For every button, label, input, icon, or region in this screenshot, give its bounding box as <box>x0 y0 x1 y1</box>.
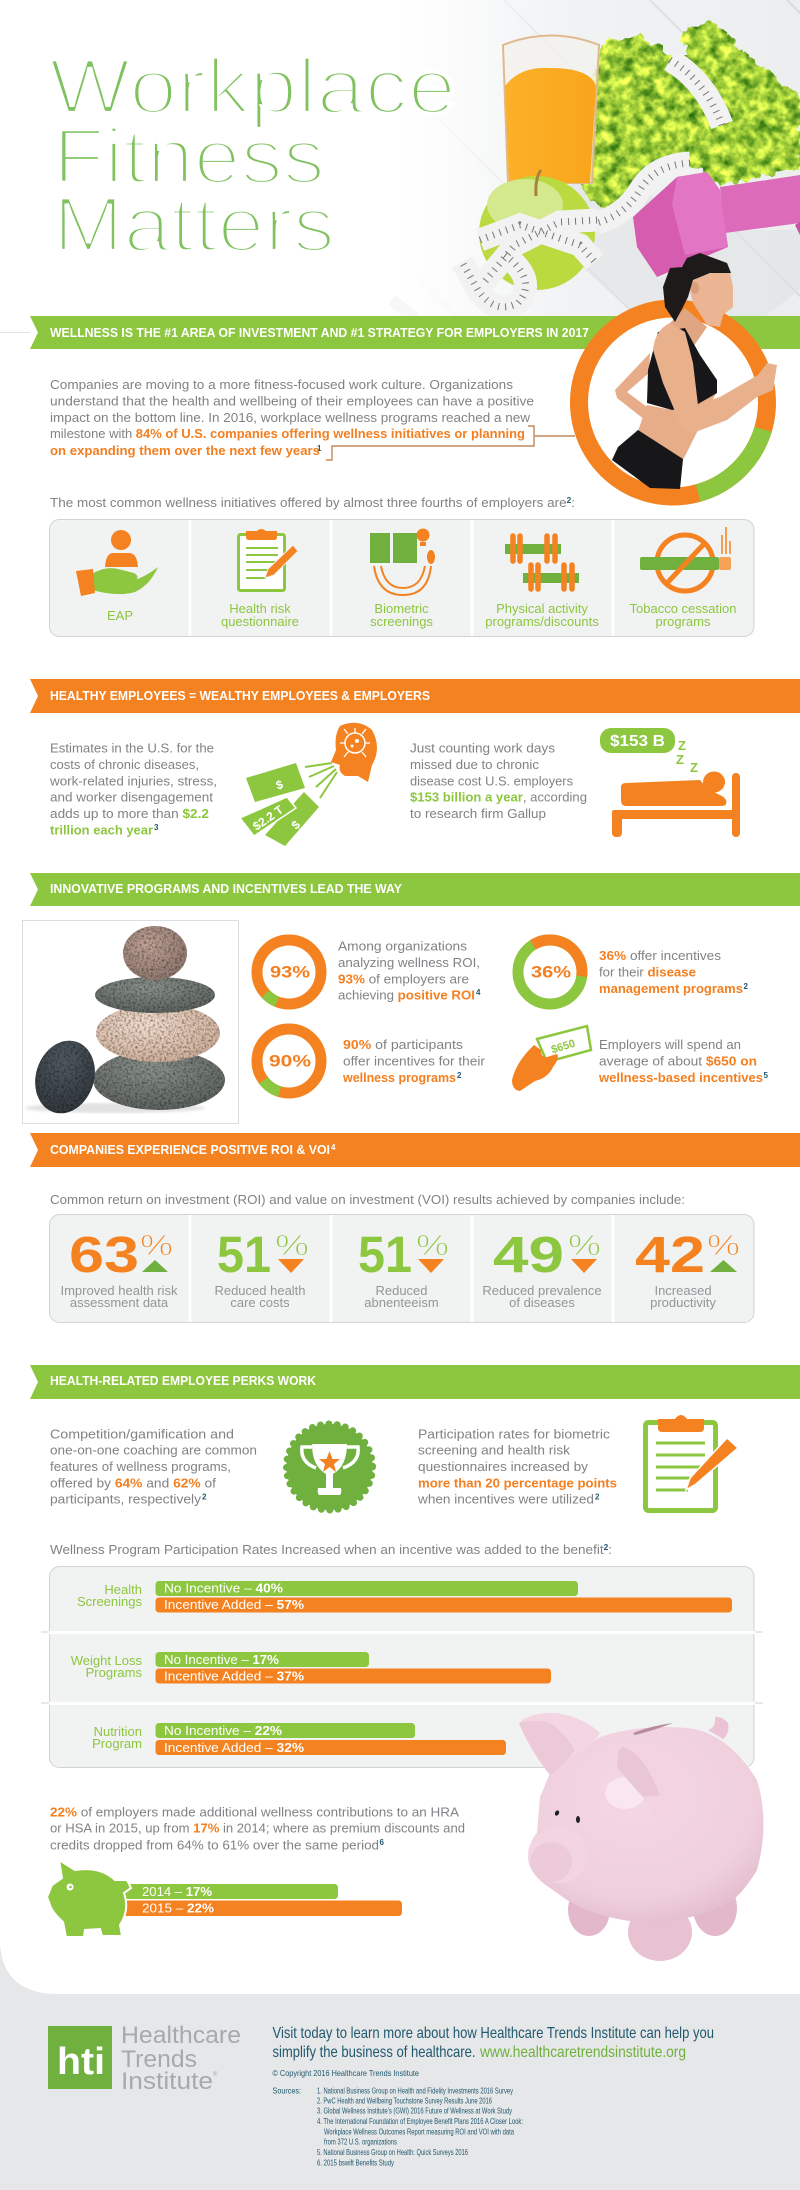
text: HRA or HSA contributions: 6 <box>380 1838 384 1847</box>
banner: positive ROI and VOI <box>30 1133 800 1167</box>
icon: small green piggy <box>47 1860 131 1937</box>
logo: Healthcare Trends Institute: ® <box>213 2071 218 2078</box>
label: physical activity: programs/discounts <box>485 614 599 629</box>
donut: 36% <box>506 928 594 1016</box>
text: gamification: 2 <box>202 1492 207 1502</box>
stat: 51% health care costs: % <box>275 1230 309 1262</box>
stat: 51% health care costs: 51 <box>217 1226 271 1283</box>
text: work days missed: to research firm Gallup <box>410 806 546 821</box>
icon: money flowing from head: $2.2 T <box>250 802 286 833</box>
intro to bar chart: Wellness Program Participation Rates Increased when an incentive was added to the benefit <box>50 1542 582 1557</box>
group: nutrition: No Incentive – 22% <box>164 1723 282 1738</box>
bar chart: participation rates <box>41 1566 763 1768</box>
sources <box>272 2085 523 2167</box>
text: 36% disease management: for their disease <box>599 964 696 980</box>
text: 93% ROI: achieving positive ROI <box>338 987 475 1002</box>
group: nutrition: Incentive Added – 32% <box>164 1740 304 1755</box>
icon: $153 B sleeping employee: Z <box>690 760 698 775</box>
icon: trophy badge <box>286 1424 372 1510</box>
group: health screenings: Health <box>104 1582 142 1597</box>
text: gamification: participants, respectively <box>50 1492 202 1507</box>
text: gamification: offered by 64% and 62% of <box>50 1475 216 1490</box>
text: $650 incentives: average of about $650 on <box>599 1054 757 1069</box>
pink dumbbell <box>633 172 800 277</box>
midriff <box>638 393 716 460</box>
text: gamification: features of wellness programs, <box>50 1459 231 1474</box>
donut: 93% <box>247 930 331 1014</box>
text: 90% participants: offer incentives for their <box>343 1054 486 1069</box>
face <box>688 270 733 327</box>
icon: money flowing from head <box>240 723 377 846</box>
group: weight loss: No Incentive – 17% <box>164 1652 279 1667</box>
photo: stacked stones <box>22 920 238 1124</box>
donut: 36%: 36% <box>531 962 571 982</box>
intro to initiatives: The most common wellness initiatives offered by almost three fourths of employers are <box>50 495 548 510</box>
logo: Healthcare Trends Institute: Institute <box>121 2068 213 2095</box>
text: 36% disease management <box>599 948 748 996</box>
text: 93% ROI: analyzing wellness ROI, <box>338 955 480 970</box>
stat: 49% <box>482 1226 602 1310</box>
callout bracket <box>326 426 575 460</box>
text: 90% participants: 2 <box>457 1071 462 1080</box>
text: cost of chronic disease: work-related injuries, stress, <box>49 773 217 788</box>
label: tobacco: programs <box>656 614 711 629</box>
bar chart: 2014 vs 2015: 2014 – 17% <box>142 1884 212 1899</box>
stat: 51% health care costs: Reduced health <box>214 1283 306 1298</box>
title: Workplace <box>49 42 456 130</box>
text: HRA or HSA contributions: credits dropped from 64% to 61% over the same period <box>50 1837 379 1852</box>
group: weight loss: Incentive Added – 37% <box>164 1668 304 1684</box>
banner: wellness: WELLNESS IS THE #1 AREA OF INVESTMENT AND #1 STRATEGY FOR EMPLOYERS IN 2017 <box>50 325 589 340</box>
icon: EAP hand holding person <box>76 530 158 596</box>
group: weight loss: Programs <box>86 1665 142 1680</box>
banner: healthy employees <box>30 679 800 713</box>
text: 93% ROI <box>338 939 481 1002</box>
sports top <box>647 328 717 410</box>
label: biometric: screenings <box>370 614 433 629</box>
intro paragraph: 1 <box>317 444 322 453</box>
stat: 51% absenteeism: Reduced <box>375 1283 428 1298</box>
text: participation rates: when incentives were utilized <box>417 1492 594 1507</box>
intro to bar chart: 2 <box>604 1543 609 1552</box>
stat: 63%: 63 <box>69 1226 139 1283</box>
text: cost of chronic disease: 3 <box>154 823 159 832</box>
icon: biometric cuff <box>370 528 435 595</box>
panel: ROI stats <box>50 1214 754 1322</box>
group: health screenings <box>77 1580 732 1612</box>
text: 93% ROI: 4 <box>476 988 481 997</box>
label: biometric: Biometric <box>374 601 429 616</box>
call to action <box>272 2025 714 2061</box>
panel: wellness initiatives <box>50 520 754 636</box>
icon: clipboard and pencil <box>238 529 298 590</box>
label: health risk: questionnaire <box>221 614 299 629</box>
text: cost of chronic disease: trillion each year <box>50 822 153 837</box>
group: nutrition <box>92 1723 506 1755</box>
text: work days missed: missed due to chronic <box>410 757 540 772</box>
intro paragraph: Companies are moving to a more fitness-focused work culture. Organizations <box>50 377 514 392</box>
icon: money flowing from head: $ <box>288 818 303 832</box>
intro to ROI results: Common return on investment (ROI) and value on investment (VOI) results achieved by companies include: <box>50 1192 685 1207</box>
stat: 42% <box>635 1226 740 1310</box>
intro paragraph: on expanding them over the next few years <box>50 443 320 458</box>
text: 90% participants: 90% of participants <box>343 1037 464 1052</box>
text: $650 incentives <box>598 1037 768 1085</box>
sources: 6. 2015 bswift Benefits Study <box>317 2158 394 2167</box>
text: 90% participants: wellness programs <box>342 1070 456 1085</box>
runner in progress ring: 84% <box>556 253 790 520</box>
bar chart: 2014 vs 2015 <box>100 1884 402 1916</box>
text: work days missed <box>410 741 587 821</box>
intro paragraph: understand that the health and wellbeing of their employees can have a positive <box>50 394 534 408</box>
icon: $153 B sleeping employee: $153 B <box>610 733 665 750</box>
intro to initiatives: : <box>571 495 575 510</box>
logo: Healthcare Trends Institute: Trends <box>121 2046 197 2073</box>
text: 90% participants <box>342 1037 486 1085</box>
label: physical activity: Physical activity <box>496 601 588 616</box>
group: weight loss <box>71 1652 551 1684</box>
donut: 93%: 93% <box>270 962 310 982</box>
text: work days missed: $153 billion a year, according <box>410 790 587 805</box>
icon: no smoking <box>640 527 731 591</box>
stat: 51% absenteeism <box>358 1226 449 1310</box>
text: participation rates: questionnaires increased by <box>418 1459 589 1474</box>
sources: from 372 U.S. organizations <box>324 2138 397 2147</box>
banner: innovative programs: INNOVATIVE PROGRAMS AND INCENTIVES LEAD THE WAY <box>50 881 402 896</box>
hair <box>663 253 731 322</box>
intro paragraph: impact on the bottom line. In 2016, workplace wellness programs reached a new <box>50 410 531 425</box>
shoulder and arm <box>653 323 777 433</box>
stat: 42%: % <box>707 1230 740 1262</box>
text: cost of chronic disease: costs of chronic diseases, <box>50 757 199 772</box>
icon: hand holding $650: $650 <box>550 1038 577 1056</box>
call to action: Visit today to learn more about how Healthcare Trends Institute can help you <box>272 2025 714 2042</box>
back arm <box>615 353 650 420</box>
text: 36% disease management: 2 <box>744 982 748 991</box>
stat: 63%: Improved health risk <box>60 1283 178 1298</box>
title <box>49 42 456 268</box>
donut: 90% <box>249 1021 329 1101</box>
stat: 51% health care costs: care costs <box>230 1295 290 1310</box>
copyright: © Copyright 2016 Healthcare Trends Institute <box>272 2068 419 2078</box>
text: cost of chronic disease: and worker disengagement <box>50 790 213 805</box>
text: 36% disease management: management programs <box>599 981 743 996</box>
icon: large clipboard <box>646 1415 738 1510</box>
logo: Healthcare Trends Institute <box>48 2022 241 2095</box>
pants <box>612 430 683 489</box>
label: EAP: EAP <box>107 608 133 623</box>
icon: $153 B sleeping employee <box>600 728 740 837</box>
text: participation rates: more than 20 percentage points <box>418 1475 617 1490</box>
label: tobacco: Tobacco cessation <box>630 601 736 616</box>
group: health screenings: No Incentive – 40% <box>164 1580 283 1596</box>
neck <box>668 308 707 347</box>
icon: $153 B sleeping employee: Z <box>678 738 686 753</box>
text: HRA or HSA contributions <box>50 1805 465 1852</box>
text: gamification: Competition/gamification and <box>50 1426 234 1441</box>
text: participation rates: 2 <box>595 1492 600 1502</box>
stat: 51% health care costs <box>214 1226 309 1310</box>
banner: innovative programs <box>30 873 800 906</box>
donut: 90%: 90% <box>269 1052 311 1070</box>
label: health risk: Health risk <box>229 601 291 616</box>
text: HRA or HSA contributions: or HSA in 2015, up from 17% in 2014; where as premium discounts and <box>50 1821 465 1836</box>
intro paragraph: milestone with 84% of U.S. companies offering wellness initiatives or planning <box>50 426 525 441</box>
call to action: www.healthcaretrendsinstitute.org <box>479 2044 686 2061</box>
sources: Sources: <box>272 2085 301 2095</box>
logo: Healthcare Trends Institute: hti <box>57 2041 105 2083</box>
banner: employee perks: HEALTH-RELATED EMPLOYEE PERKS WORK <box>50 1373 317 1388</box>
logo: Healthcare Trends Institute: Healthcare <box>121 2022 241 2049</box>
stat: 49%: % <box>568 1230 601 1262</box>
banner: positive ROI and VOI: 4 <box>331 1143 336 1152</box>
stat: 63%: assessment data <box>70 1295 169 1310</box>
header photo: wood table with juice, apple, lettuce, dumbbell and tape <box>413 0 800 316</box>
bar chart: 2014 vs 2015: 2015 – 22% <box>142 1900 214 1916</box>
ear <box>691 282 699 294</box>
sources: 2. PwC Health and Wellbeing Touchstone Survey Results June 2016 <box>317 2096 492 2105</box>
banner: wellness <box>0 316 800 349</box>
intro to initiatives: 2 <box>567 496 572 505</box>
intro paragraph <box>50 377 534 458</box>
measuring tape <box>452 55 733 310</box>
text: 36% disease management: 36% offer incentives <box>599 948 722 963</box>
call to action: simplify the business of healthcare. <box>272 2044 476 2061</box>
icon: money flowing from head: $ <box>274 777 285 793</box>
sources: 1. National Business Group on Health and Fidelity Investments 2016 Survey <box>317 2086 513 2095</box>
banner: positive ROI and VOI: COMPANIES EXPERIENCE POSITIVE ROI & VOI <box>50 1142 330 1157</box>
group: weight loss: Weight Loss <box>71 1653 142 1668</box>
stat: 42%: productivity <box>650 1295 716 1310</box>
sources: 5. National Business Group on Health: Quick Surveys 2016 <box>317 2148 468 2157</box>
banner: healthy employees: HEALTHY EMPLOYEES = WEALTHY EMPLOYEES & EMPLOYERS <box>50 688 430 703</box>
title: Matters <box>53 180 335 268</box>
sources: 4. The International Foundation of Employee Benefit Plans 2016 A Closer Look: <box>317 2117 523 2126</box>
text: gamification <box>50 1426 257 1507</box>
group: nutrition: Nutrition <box>94 1724 142 1739</box>
text: 93% ROI: 93% of employers are <box>338 972 469 986</box>
stat: 49%: of diseases <box>509 1295 575 1310</box>
banner: employee perks <box>30 1365 800 1399</box>
icon: hand holding $650 <box>512 1026 591 1091</box>
icon: dumbbells <box>505 536 579 589</box>
glass of orange juice <box>503 36 599 183</box>
text: cost of chronic disease <box>49 741 217 837</box>
text: 93% ROI: Among organizations <box>338 939 468 954</box>
sources: Workplace Wellness Outcomes Report measuring ROI and VOI with data <box>324 2127 514 2136</box>
stat: 49%: Reduced prevalence <box>482 1283 602 1298</box>
text: cost of chronic disease: adds up to more than $2.2 <box>50 806 209 821</box>
lettuce <box>572 20 800 210</box>
stat: 63% <box>60 1226 178 1310</box>
text: $650 incentives: wellness-based incentives <box>598 1070 763 1085</box>
text: participation rates <box>417 1426 617 1507</box>
text: $650 incentives: 5 <box>764 1071 768 1080</box>
text: work days missed: Just counting work days <box>410 741 556 756</box>
stat: 49%: 49 <box>493 1226 564 1283</box>
stat: 63%: % <box>140 1230 173 1262</box>
group: health screenings: Incentive Added – 57% <box>164 1597 304 1612</box>
icon: $153 B sleeping employee: Z <box>676 752 684 767</box>
photo: pink piggy bank <box>519 1713 764 1961</box>
text: cost of chronic disease: Estimates in the U.S. for the <box>50 741 214 756</box>
footer background <box>0 1945 800 2190</box>
text: participation rates: Participation rates for biometric <box>418 1426 611 1441</box>
group: nutrition: Program <box>92 1736 142 1751</box>
stat: 42%: 42 <box>635 1226 705 1283</box>
text: HRA or HSA contributions: 22% of employers made additional wellness contributions to an HRA <box>50 1805 459 1820</box>
sources: 3. Global Wellness Institute’s (GWI) 2016 Future of Wellness at Work Study <box>317 2106 512 2115</box>
text: $650 incentives: Employers will spend an <box>599 1037 741 1052</box>
group: health screenings: Screenings <box>77 1594 142 1609</box>
text: gamification: one-on-one coaching are common <box>50 1443 257 1458</box>
stat: 51% absenteeism: abnenteeism <box>364 1295 439 1310</box>
stat: 42%: Increased <box>654 1283 712 1298</box>
apple <box>479 170 595 290</box>
stat: 51% absenteeism: % <box>416 1230 449 1262</box>
text: participation rates: screening and health risk <box>418 1443 571 1458</box>
title: Fitness <box>53 112 325 200</box>
intro to bar chart: : <box>608 1542 612 1557</box>
text: work days missed: disease cost U.S. employers <box>410 773 573 788</box>
stat: 51% absenteeism: 51 <box>358 1226 412 1283</box>
